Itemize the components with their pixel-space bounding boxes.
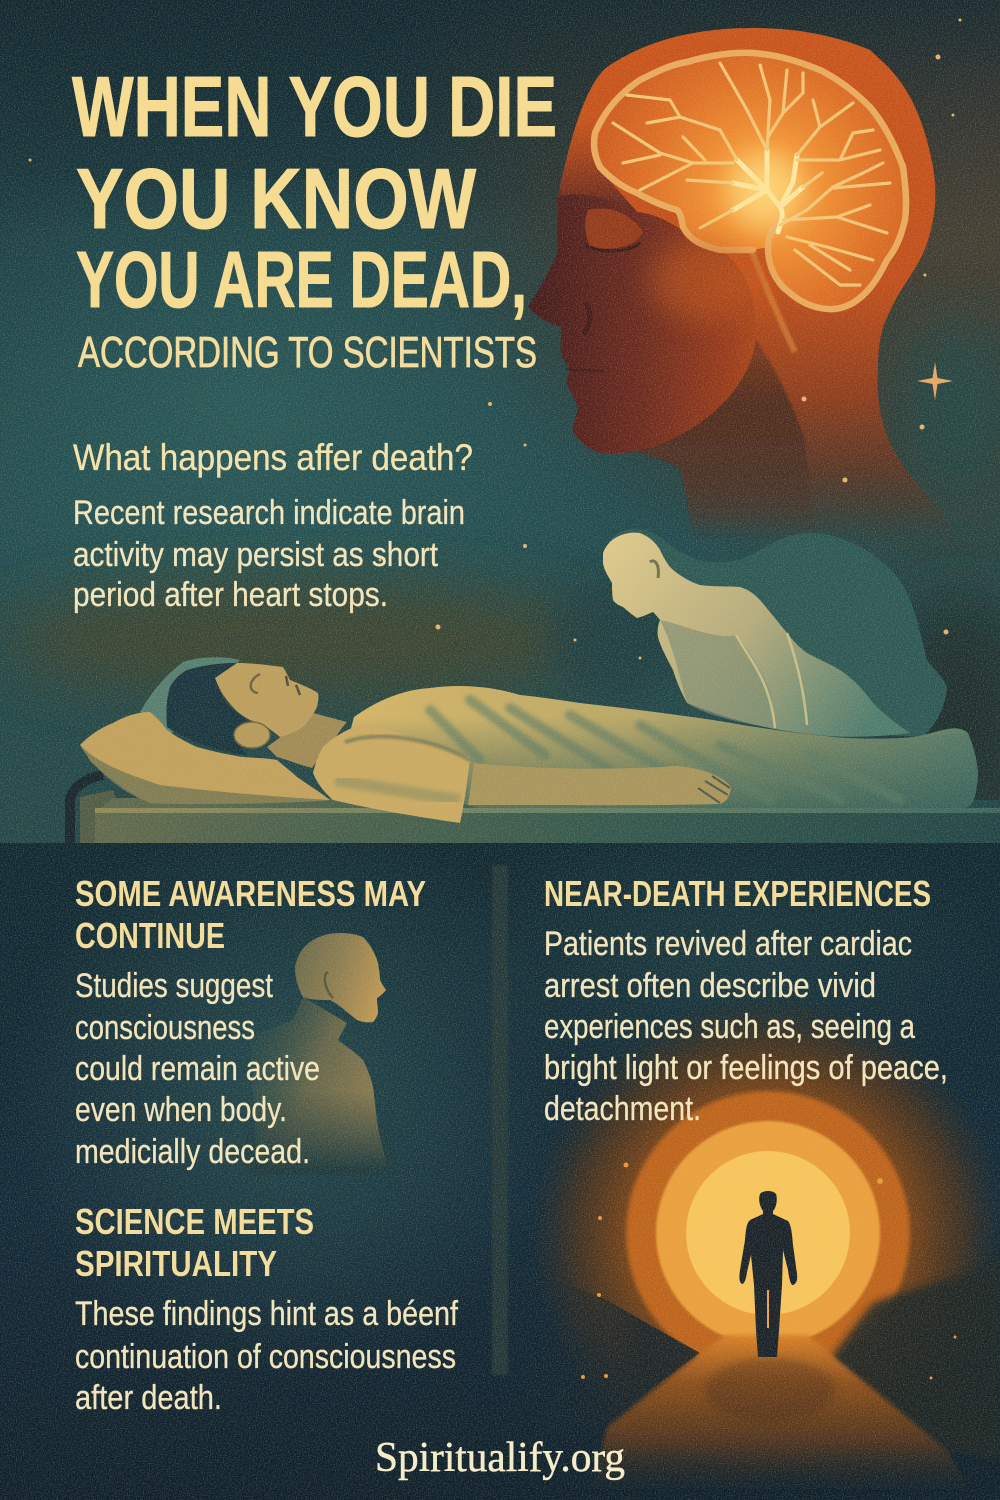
shadow under the jaw (630, 325, 815, 540)
outer glow (528, 993, 1000, 1473)
heading: SPIRITUALITY (75, 1243, 277, 1284)
subtitle: ACCORDING TO SCIENTISTS (78, 328, 537, 377)
figure head (295, 933, 386, 1022)
title: WHEN YOU DIE (72, 60, 557, 155)
heading (75, 1201, 314, 1284)
pillow (80, 712, 330, 804)
eye socket and closed eyelid (585, 209, 643, 249)
title: YOU ARE DEAD, (76, 235, 527, 324)
section: science meets spirituality (75, 1201, 458, 1417)
text block: after death. (75, 1379, 222, 1417)
forehead shading (558, 115, 640, 215)
text block: medicially decead. (75, 1133, 310, 1171)
spirit ear (650, 561, 658, 578)
mattress (95, 798, 1000, 843)
text block (75, 1295, 458, 1417)
brain fill (594, 53, 906, 309)
text block: Studies suggest (75, 967, 273, 1005)
section: what happens after death (73, 437, 473, 614)
glow under the brain (650, 240, 760, 320)
sheet (340, 686, 978, 808)
vertical divider (492, 865, 508, 1375)
face (528, 194, 756, 453)
face (215, 663, 318, 737)
illustration: walking into the light (528, 993, 1000, 1500)
figure ear (325, 972, 333, 998)
heading: SCIENCE MEETS (75, 1201, 314, 1242)
text block: could remain active (75, 1050, 320, 1088)
dark wedges (530, 1275, 700, 1440)
illustration: ghostly spirit rising (603, 529, 947, 737)
illustration: person lying on a bed (70, 657, 1000, 843)
head silhouette with neck (560, 28, 960, 540)
spirit arm (660, 620, 775, 728)
sheet shading (340, 686, 978, 808)
scattered stars (28, 18, 962, 1152)
nose and mouth (286, 676, 300, 695)
figure shadow (705, 1358, 835, 1422)
brain stem (752, 252, 795, 352)
text block: activity may persist as short (73, 536, 438, 574)
pillow back shadow (140, 657, 240, 735)
text block (544, 925, 948, 1128)
illustration: glowing head and brain (528, 28, 960, 540)
heading: CONTINUE (75, 915, 225, 956)
walking silhouette (739, 1191, 797, 1357)
text block: even when body. (75, 1091, 287, 1129)
text block: Recent research indicate brain (73, 494, 465, 532)
illustration: small figure in profile (245, 933, 395, 1175)
heading (75, 873, 426, 956)
hair (166, 663, 250, 755)
text block: period after heart stops. (73, 576, 388, 614)
figure body (250, 997, 387, 1170)
light rings (626, 1091, 910, 1375)
star: sparkle right of head (917, 362, 953, 400)
neck (267, 713, 347, 768)
lower panel background (0, 800, 1000, 1500)
spirit body (603, 533, 910, 737)
title: YOU KNOW (76, 152, 477, 247)
leg gap highlight (767, 1290, 769, 1328)
text block: Patients revived after cardiac (544, 925, 912, 963)
bed frame (70, 775, 103, 843)
text block: These findings hint as a béenf (75, 1295, 458, 1333)
path (590, 1335, 975, 1500)
title (72, 60, 557, 324)
section: near-death experiences (544, 873, 948, 1128)
brain outline (594, 53, 906, 309)
section: some awareness may continue (75, 873, 426, 1171)
heading: SOME AWARENESS MAY (75, 873, 426, 914)
tunnel sparks (581, 1162, 956, 1380)
text block: detachment. (544, 1090, 701, 1128)
pillow underside shade (80, 745, 330, 804)
brain veins (613, 63, 890, 285)
closed eye (251, 674, 260, 693)
nostril and lips (584, 302, 590, 334)
arm and hand (468, 763, 731, 805)
central brain glow (727, 152, 803, 228)
sleeve (313, 725, 470, 823)
spirit wisp (610, 529, 947, 737)
mattress top edge (95, 808, 1000, 813)
text block: consciousness (75, 1009, 255, 1047)
heading: What happens affer death? (73, 437, 473, 478)
text block: continuation of consciousness (75, 1338, 456, 1376)
text block (73, 494, 465, 614)
ear (234, 722, 270, 748)
text block: experiences such as, seeing a (544, 1008, 915, 1046)
footer: site name: Spiritualify.org (375, 1435, 625, 1481)
text block (75, 967, 320, 1171)
text block: arrest often describe vivid (544, 967, 876, 1005)
sheet folds (430, 700, 900, 800)
